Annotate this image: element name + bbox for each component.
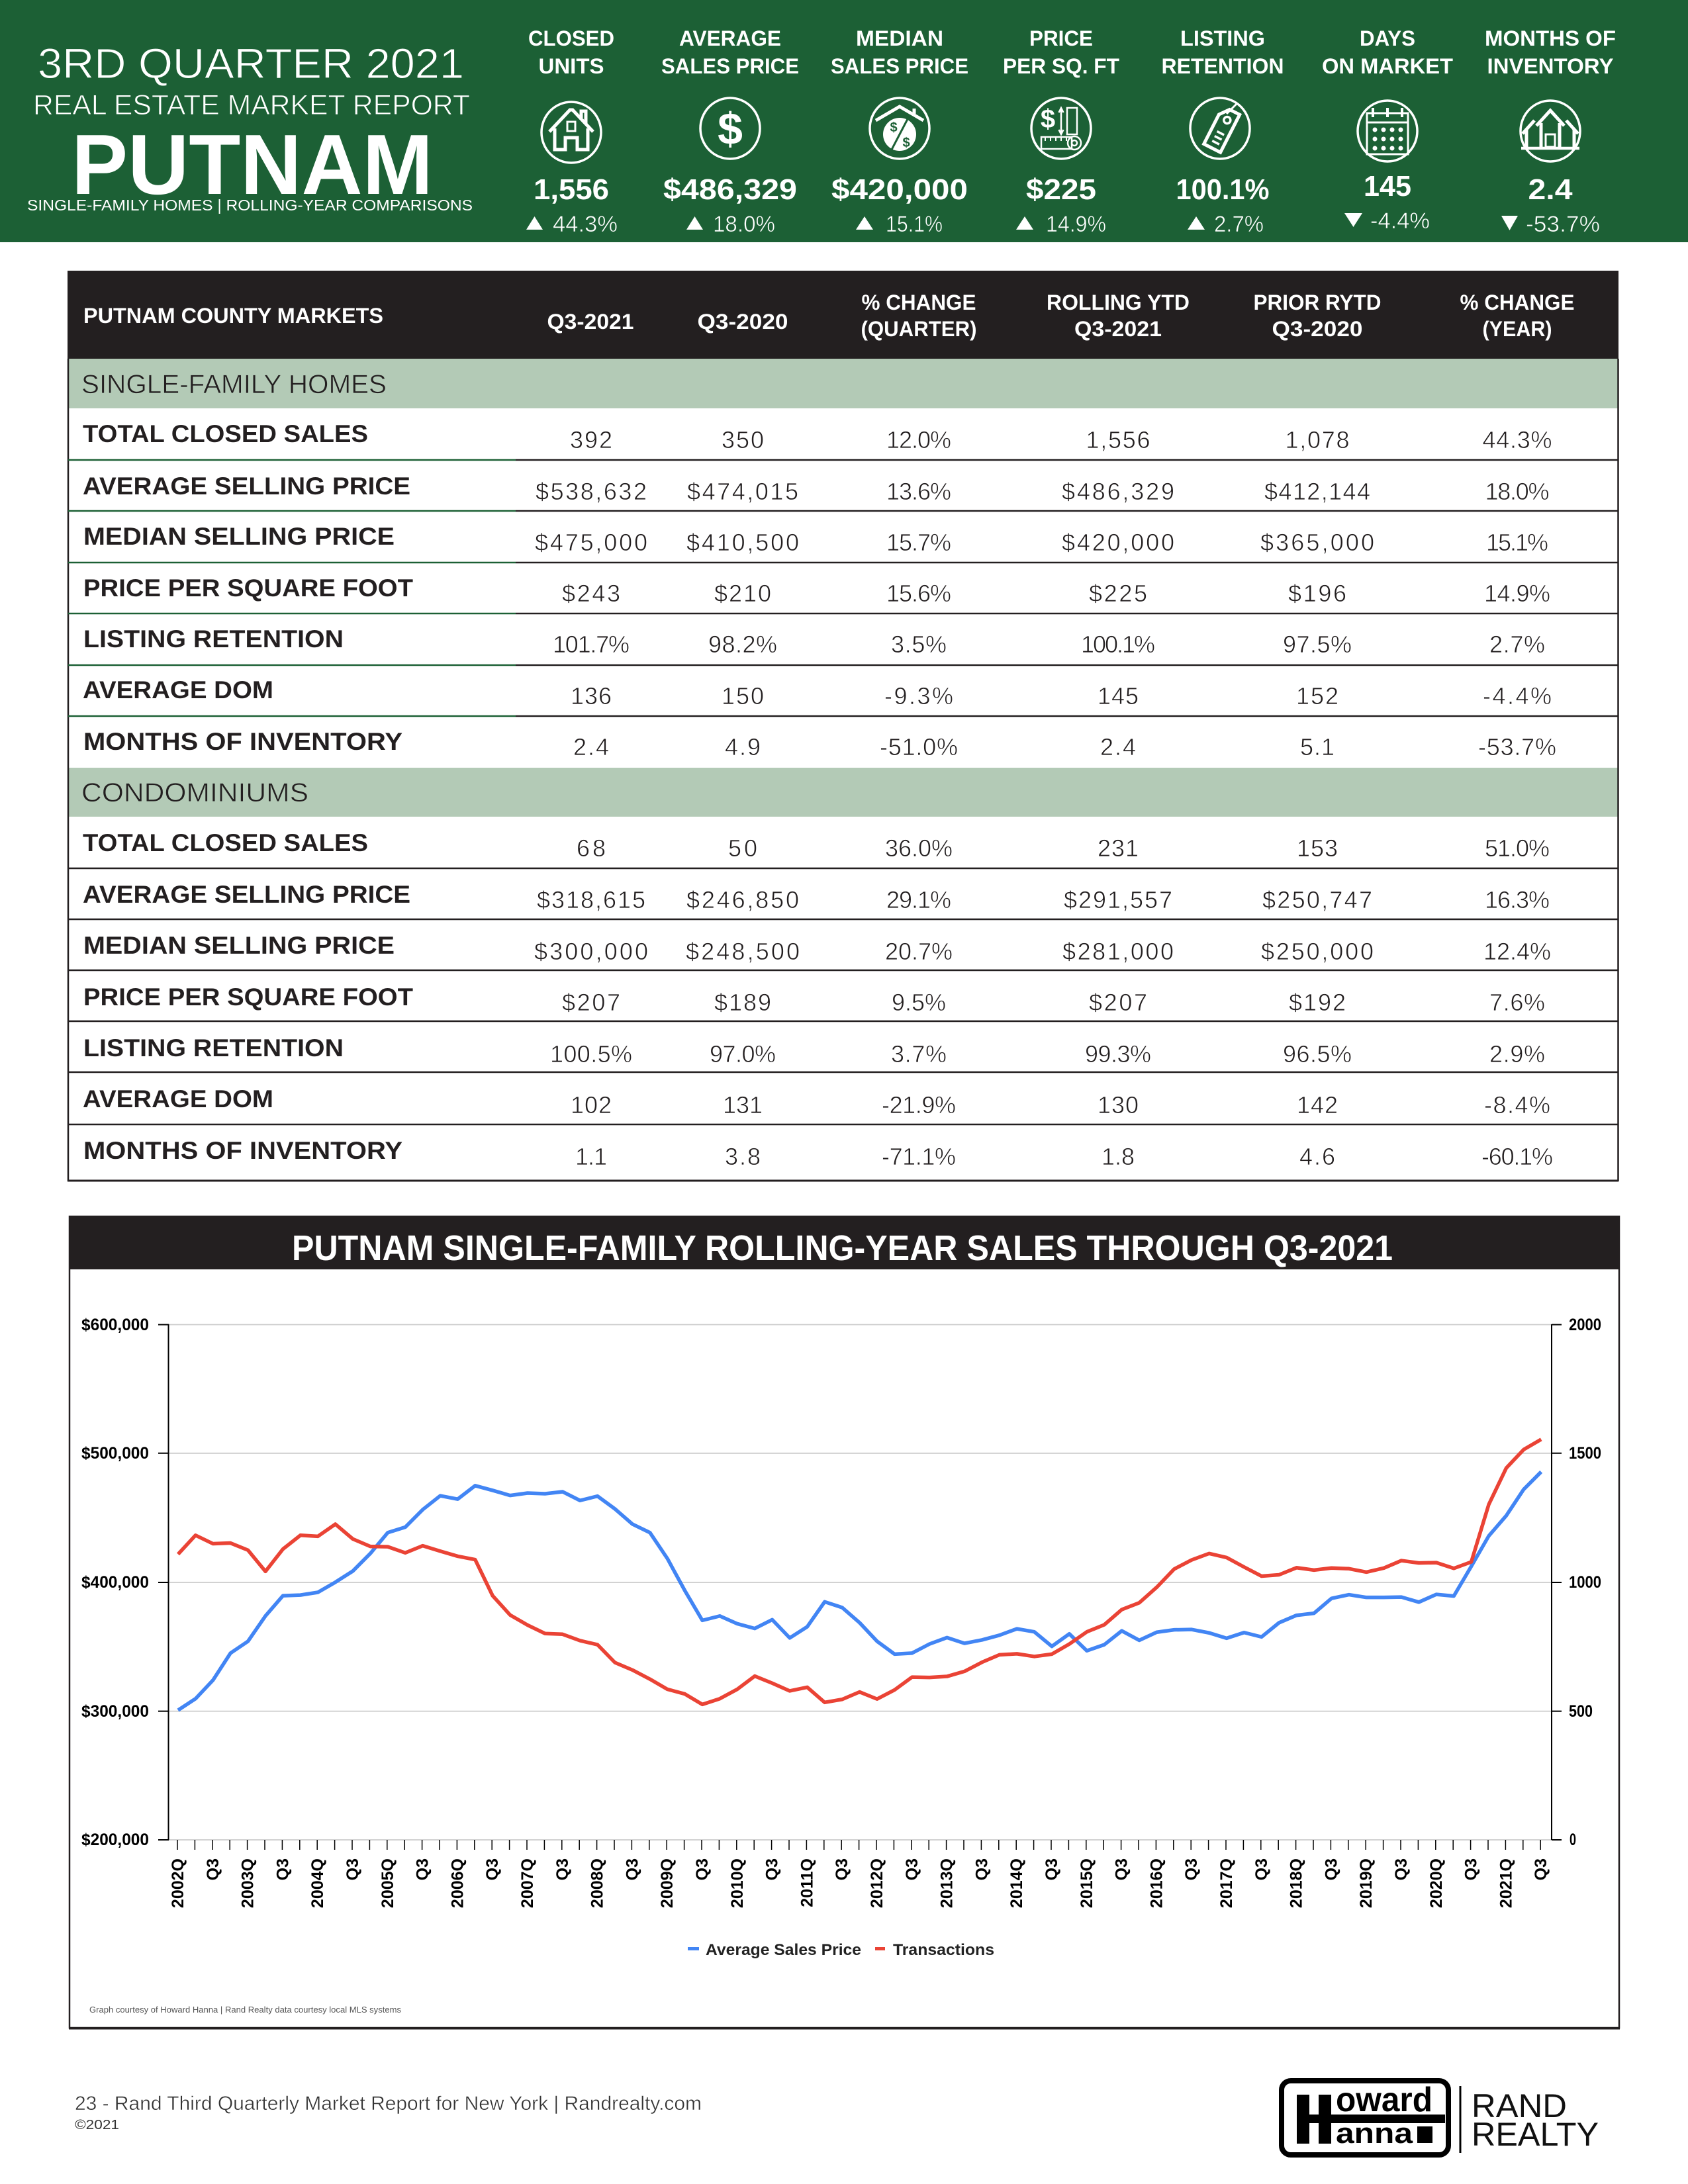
row: condo price per square foot: PRICE PER SQUARE FOOT [83,983,413,1011]
row: SF average DOM: 152 [1296,682,1338,709]
row: SF listing retention: 97.5% [1283,631,1352,658]
row: condo listing retention: 2.9% [1489,1040,1545,1068]
stat: price per sq ft: 14.9% [1046,212,1106,237]
icon: dollar and tape measure [1031,98,1091,159]
row: SF median selling price: 15.7% [886,529,951,556]
row: condo average DOM: -21.9% [882,1091,956,1118]
heading: Putnam: PUTNAM [71,117,433,212]
row: condo average selling price: $291,557 [1064,886,1172,913]
row: condo price per square foot: $207 [562,989,620,1016]
row: SF price per square foot: 15.6% [886,580,951,607]
row: SF median selling price: $475,000 [535,529,647,556]
row: SF average DOM: 145 [1098,682,1139,709]
table header row: (QUARTER) [861,317,977,341]
row: condo listing retention: LISTING RETENTION [83,1034,344,1062]
stat: closed units: CLOSED [528,26,614,50]
row: SF months of inventory: 4.9 [725,733,761,760]
stat: days on market: DAYS [1360,26,1415,50]
stat: days on market: 145 [1364,170,1411,203]
row: SF average selling price: $486,329 [1062,478,1174,505]
left axis: $300,000 [81,1702,149,1721]
x-axis quarter labels: Q3 [1532,1858,1550,1880]
row: condo listing retention: 3.7% [891,1040,947,1068]
row: SF total closed sales [83,420,1552,453]
row: SF price per square foot: PRICE PER SQUARE FOOT [83,574,413,602]
row: SF median selling price: 15.1% [1486,529,1548,556]
bottom axis ticks [177,1840,1540,1850]
row: SF price per square foot: 14.9% [1484,580,1550,607]
tagline: SINGLE-FAMILY HOMES | ROLLING-YEAR COMPARISONS [27,197,473,214]
left axis: $500,000 [81,1444,149,1463]
row: condo median selling price: $300,000 [534,938,648,965]
row: SF average selling price: AVERAGE SELLING PRICE [83,473,410,500]
panel: rolling-year sales chart [69,1216,1620,2028]
x-axis quarter labels: Q3 [1392,1858,1411,1880]
x-axis quarter labels: 2012Q [868,1858,886,1908]
row: condo total closed sales: 51.0% [1485,835,1550,862]
row: SF months of inventory: -51.0% [880,733,958,760]
row: SF listing retention: 101.7% [553,631,630,658]
icon: dollar [700,98,760,159]
row: SF price per square foot: $196 [1288,580,1346,607]
row: SF median selling price: $420,000 [1062,529,1174,556]
row: SF months of inventory: 2.4 [1100,733,1136,760]
row: condo months of inventory: 1.1 [575,1143,607,1170]
stat: median sales price [831,26,968,237]
row: condo average selling price: AVERAGE SELLING PRICE [83,881,410,908]
row: SF median selling price: MEDIAN SELLING PRICE [83,523,395,550]
row: condo listing retention: 99.3% [1085,1040,1151,1068]
x-axis quarter labels: Q3 [1322,1858,1340,1880]
icon: calendar [1358,101,1417,161]
x-axis quarter labels: Q3 [1182,1858,1201,1880]
row: condo average selling price: $246,850 [686,886,799,913]
x-axis quarter labels [169,1858,1550,1908]
x-axis quarter labels: Q3 [414,1858,432,1880]
row: SF price per square foot: $243 [562,580,620,607]
stat: closed units: UNITS [539,54,604,78]
subtitle: real estate market report: REAL ESTATE MARKET REPORT [33,89,470,121]
x-axis quarter labels: Q3 [972,1858,991,1880]
x-axis quarter labels: Q3 [693,1858,712,1880]
stat: days on market [1322,26,1453,234]
x-axis quarter labels: Q3 [1252,1858,1271,1880]
row: condo median selling price: $250,000 [1261,938,1374,965]
table header row: % CHANGE [1460,291,1574,314]
row: condo total closed sales: 231 [1098,835,1139,862]
chart legend [688,1941,994,1959]
row: SF average DOM: -4.4% [1483,682,1552,709]
icon: price tag [1190,98,1250,159]
row: condo total closed sales: 50 [728,835,757,862]
row: condo average DOM: AVERAGE DOM [83,1085,273,1113]
row: condo average DOM: 131 [723,1091,763,1118]
row: SF total closed sales: TOTAL CLOSED SALES [83,420,368,447]
row: SF price per square foot: $210 [714,580,771,607]
x-axis quarter labels: Q3 [1113,1858,1131,1880]
x-axis quarter labels: 2009Q [658,1858,677,1908]
chart heading bar [70,1216,1619,1269]
row: condo price per square foot [83,983,1545,1016]
row: condo median selling price: MEDIAN SELLING PRICE [83,932,395,959]
row: condo months of inventory: 3.8 [725,1143,761,1170]
x-axis quarter labels: 2007Q [518,1858,537,1908]
row: SF median selling price: $365,000 [1260,529,1374,556]
table header row: Q3-2020 [1272,317,1362,341]
icon: house with percent dollars: $ [890,120,898,135]
x-axis quarter labels: Q3 [204,1858,222,1880]
stat: price per sq ft: PER SQ. FT [1003,54,1119,78]
logo: Howard Hanna [1282,2081,1448,2155]
table header row: PRIOR RYTD [1254,291,1381,314]
logo: Howard Hanna: anna [1336,2117,1413,2150]
chart legend: Transactions [893,1941,994,1959]
stat: closed units: 44.3% [553,212,618,237]
x-axis quarter labels: Q3 [833,1858,851,1880]
row: SF average selling price: $538,632 [536,478,647,505]
section band: condominiums: CONDOMINIUMS [81,778,308,807]
row: condo total closed sales: 153 [1297,835,1338,862]
row: condo price per square foot: $189 [714,989,771,1016]
row: SF total closed sales: 44.3% [1483,426,1552,453]
x-axis quarter labels: 2010Q [728,1858,747,1908]
row: SF total closed sales: 1,078 [1286,426,1349,453]
row: SF average DOM: 150 [722,682,764,709]
row: SF listing retention: 98.2% [708,631,777,658]
x-axis quarter labels: 2019Q [1357,1858,1376,1908]
row: condo average DOM: -8.4% [1484,1091,1550,1118]
stat: price per sq ft: PRICE [1029,26,1093,50]
stat: closed units [526,26,618,237]
left axis: $400,000 [81,1573,149,1592]
row: SF price per square foot [83,574,1550,607]
logo: Rand Realty [1459,2086,1599,2153]
stat: listing retention: RETENTION [1161,54,1284,78]
header banner [0,0,1688,242]
row: condo median selling price: $281,000 [1062,938,1174,965]
stat: average sales price: 18.0% [713,212,775,237]
chart heading bar: PUTNAM SINGLE-FAMILY ROLLING-YEAR SALES THROUGH Q3-2021 [292,1228,1393,1268]
logo: Rand Realty: RAND [1472,2087,1567,2124]
stat: average sales price [661,26,799,237]
stat: median sales price: 15.1% [886,212,943,237]
x-axis quarter labels: 2016Q [1147,1858,1166,1908]
row: SF listing retention: 100.1% [1081,631,1155,658]
logo: Howard Hanna: oward [1336,2081,1432,2119]
row: condo median selling price [83,932,1551,965]
icon: house with percent dollars: $ [902,136,910,150]
x-axis quarter labels: 2017Q [1217,1858,1236,1908]
row: SF average selling price: 13.6% [886,478,951,505]
table header row: (YEAR) [1483,317,1552,341]
row: SF total closed sales: 350 [722,426,764,453]
right axis: 500 [1569,1702,1593,1721]
right axis: 2000 [1569,1316,1601,1334]
row: condo price per square foot: $207 [1089,989,1147,1016]
x-axis quarter labels: Q3 [763,1858,782,1880]
x-axis quarter labels: Q3 [623,1858,641,1880]
stat: months of inventory: MONTHS OF [1485,26,1616,50]
table header row [68,271,1618,359]
row: SF months of inventory: MONTHS OF INVENTORY [83,728,402,755]
row: condo total closed sales: 36.0% [885,835,953,862]
row: SF average selling price: $412,144 [1264,478,1370,505]
row: condo price per square foot: $192 [1289,989,1346,1016]
row: SF months of inventory: 2.4 [573,733,609,760]
stat: listing retention: 100.1% [1176,173,1270,206]
row: SF listing retention: 2.7% [1489,631,1545,658]
row: condo months of inventory: MONTHS OF INVENTORY [83,1137,402,1164]
row: condo price per square foot: 7.6% [1489,989,1545,1016]
x-axis quarter labels: 2008Q [588,1858,607,1908]
row: condo total closed sales [83,829,1550,862]
stat: months of inventory: -53.7% [1526,212,1600,237]
row: SF total closed sales: 12.0% [886,426,951,453]
row: condo months of inventory [83,1137,1553,1170]
x-axis quarter labels: Q3 [273,1858,292,1880]
series: average sales price [178,1472,1541,1710]
row: condo average DOM: 102 [571,1091,612,1118]
right axis: 1500 [1569,1444,1601,1463]
x-axis quarter labels: Q3 [483,1858,502,1880]
row: SF median selling price: $410,500 [686,529,799,556]
footer text [75,2093,702,2132]
stat: months of inventory: INVENTORY [1487,54,1614,78]
row: SF total closed sales: 1,556 [1086,426,1150,453]
x-axis quarter labels: 2002Q [169,1858,187,1908]
right axis [1552,1316,1601,1849]
row: condo listing retention [83,1034,1545,1068]
chart legend: Average Sales Price [706,1941,861,1959]
row: condo listing retention: 96.5% [1283,1040,1352,1068]
x-axis quarter labels: 2003Q [239,1858,258,1908]
x-axis quarter labels: Q3 [553,1858,572,1880]
x-axis quarter labels: Q3 [1462,1858,1481,1880]
row: condo average selling price: $250,747 [1262,886,1372,913]
row: condo months of inventory: 4.6 [1299,1143,1335,1170]
x-axis quarter labels: 2006Q [448,1858,467,1908]
icon: dollar and tape measure: $ [1041,105,1055,134]
row: condo average DOM: 142 [1297,1091,1338,1118]
table header row: ROLLING YTD [1047,291,1190,314]
line chart [81,1316,1601,1908]
table header row: PUTNAM COUNTY MARKETS [83,304,383,328]
row: condo average selling price: $318,615 [537,886,645,913]
row: SF listing retention: 3.5% [891,631,947,658]
footer text: 23 - Rand Third Quarterly Market Report for New York | Randrealty.com [75,2093,702,2115]
row: condo listing retention: 100.5% [550,1040,632,1068]
stat: median sales price: $420,000 [831,173,968,206]
section band: single-family homes: SINGLE-FAMILY HOMES [81,370,387,399]
x-axis quarter labels: 2020Q [1427,1858,1446,1908]
row: SF average selling price: $474,015 [687,478,798,505]
row: SF months of inventory: 5.1 [1300,733,1335,760]
row: condo average selling price: 29.1% [886,886,951,913]
x-axis quarter labels: 2011Q [798,1858,816,1907]
row: SF months of inventory: -53.7% [1478,733,1556,760]
stat: price per sq ft: $225 [1026,173,1096,206]
icon: house [541,102,601,163]
row: SF median selling price [83,523,1548,556]
stat: median sales price: MEDIAN [856,26,943,50]
row: SF total closed sales: 392 [570,426,612,453]
x-axis quarter labels: 2014Q [1008,1858,1026,1908]
left axis: $600,000 [81,1316,149,1334]
logo: Rand Realty: REALTY [1472,2116,1599,2153]
stat: listing retention [1161,26,1284,237]
row: SF average DOM: -9.3% [884,682,953,709]
row: condo months of inventory: -60.1% [1481,1143,1553,1170]
x-axis quarter labels: 2004Q [308,1858,327,1908]
row: condo median selling price: 12.4% [1483,938,1551,965]
stat: average sales price: AVERAGE [679,26,781,50]
stat: price per sq ft [1003,26,1119,237]
stat: months of inventory: 2.4 [1528,173,1573,206]
left axis [81,1316,169,1849]
x-axis quarter labels: 2021Q [1497,1858,1515,1908]
row: condo median selling price: $248,500 [686,938,800,965]
row: condo listing retention: 97.0% [710,1040,776,1068]
stat: closed units: 1,556 [534,173,609,206]
row: SF average DOM [83,676,1552,709]
row: condo months of inventory: -71.1% [882,1143,956,1170]
icon: row of houses [1521,101,1580,161]
row: condo median selling price: 20.7% [885,938,953,965]
row: SF price per square foot: $225 [1089,580,1147,607]
row: SF average selling price [83,473,1549,505]
row: SF average DOM: 136 [571,682,612,709]
left axis: $200,000 [81,1831,149,1849]
table header row: Q3-2021 [1074,317,1162,341]
stat: average sales price: SALES PRICE [661,54,799,78]
row: condo total closed sales: TOTAL CLOSED SALES [83,829,368,856]
x-axis quarter labels: 2015Q [1078,1858,1096,1908]
x-axis quarter labels: 2005Q [379,1858,397,1908]
row: SF months of inventory [83,728,1556,760]
x-axis quarter labels: 2013Q [938,1858,957,1908]
row: SF average DOM: AVERAGE DOM [83,676,273,704]
x-axis quarter labels: Q3 [344,1858,362,1880]
row: SF listing retention: LISTING RETENTION [83,625,344,653]
right axis: 0 [1570,1831,1576,1849]
row: condo months of inventory: 1.8 [1102,1143,1135,1170]
stat: median sales price: SALES PRICE [831,54,968,78]
row: SF listing retention [83,625,1545,658]
row: condo average selling price: 16.3% [1485,886,1550,913]
stat: days on market: -4.4% [1370,208,1430,234]
series: transactions [178,1439,1541,1704]
footer text: ©2021 [75,2118,119,2132]
row: SF average selling price: 18.0% [1485,478,1549,505]
icon: house with percent dollars [870,98,929,159]
row: condo price per square foot: 9.5% [892,989,946,1016]
row: condo total closed sales: 68 [577,835,606,862]
stat: listing retention: LISTING [1180,26,1265,50]
stat: months of inventory [1485,26,1616,237]
row: condo average DOM: 130 [1098,1091,1139,1118]
stat: listing retention: 2.7% [1214,212,1264,237]
x-axis quarter labels: 2018Q [1288,1858,1306,1908]
panel: markets table [68,271,1618,1181]
x-axis quarter labels: Q3 [903,1858,921,1880]
table header row: Q3-2021 [547,310,634,334]
table header row: Q3-2020 [698,310,788,334]
table header row: % CHANGE [862,291,976,314]
title: 3rd quarter 2021: 3RD QUARTER 2021 [38,40,464,87]
graph credit: Graph courtesy of Howard Hanna | Rand Realty data courtesy local MLS systems [89,2005,401,2015]
stat: days on market: ON MARKET [1322,54,1453,78]
right axis: 1000 [1569,1573,1601,1592]
stat: average sales price: $486,329 [663,173,797,206]
icon: dollar: $ [718,104,743,154]
row: condo average DOM [83,1085,1550,1118]
row: condo average selling price [83,881,1550,913]
x-axis quarter labels: Q3 [1043,1858,1061,1880]
